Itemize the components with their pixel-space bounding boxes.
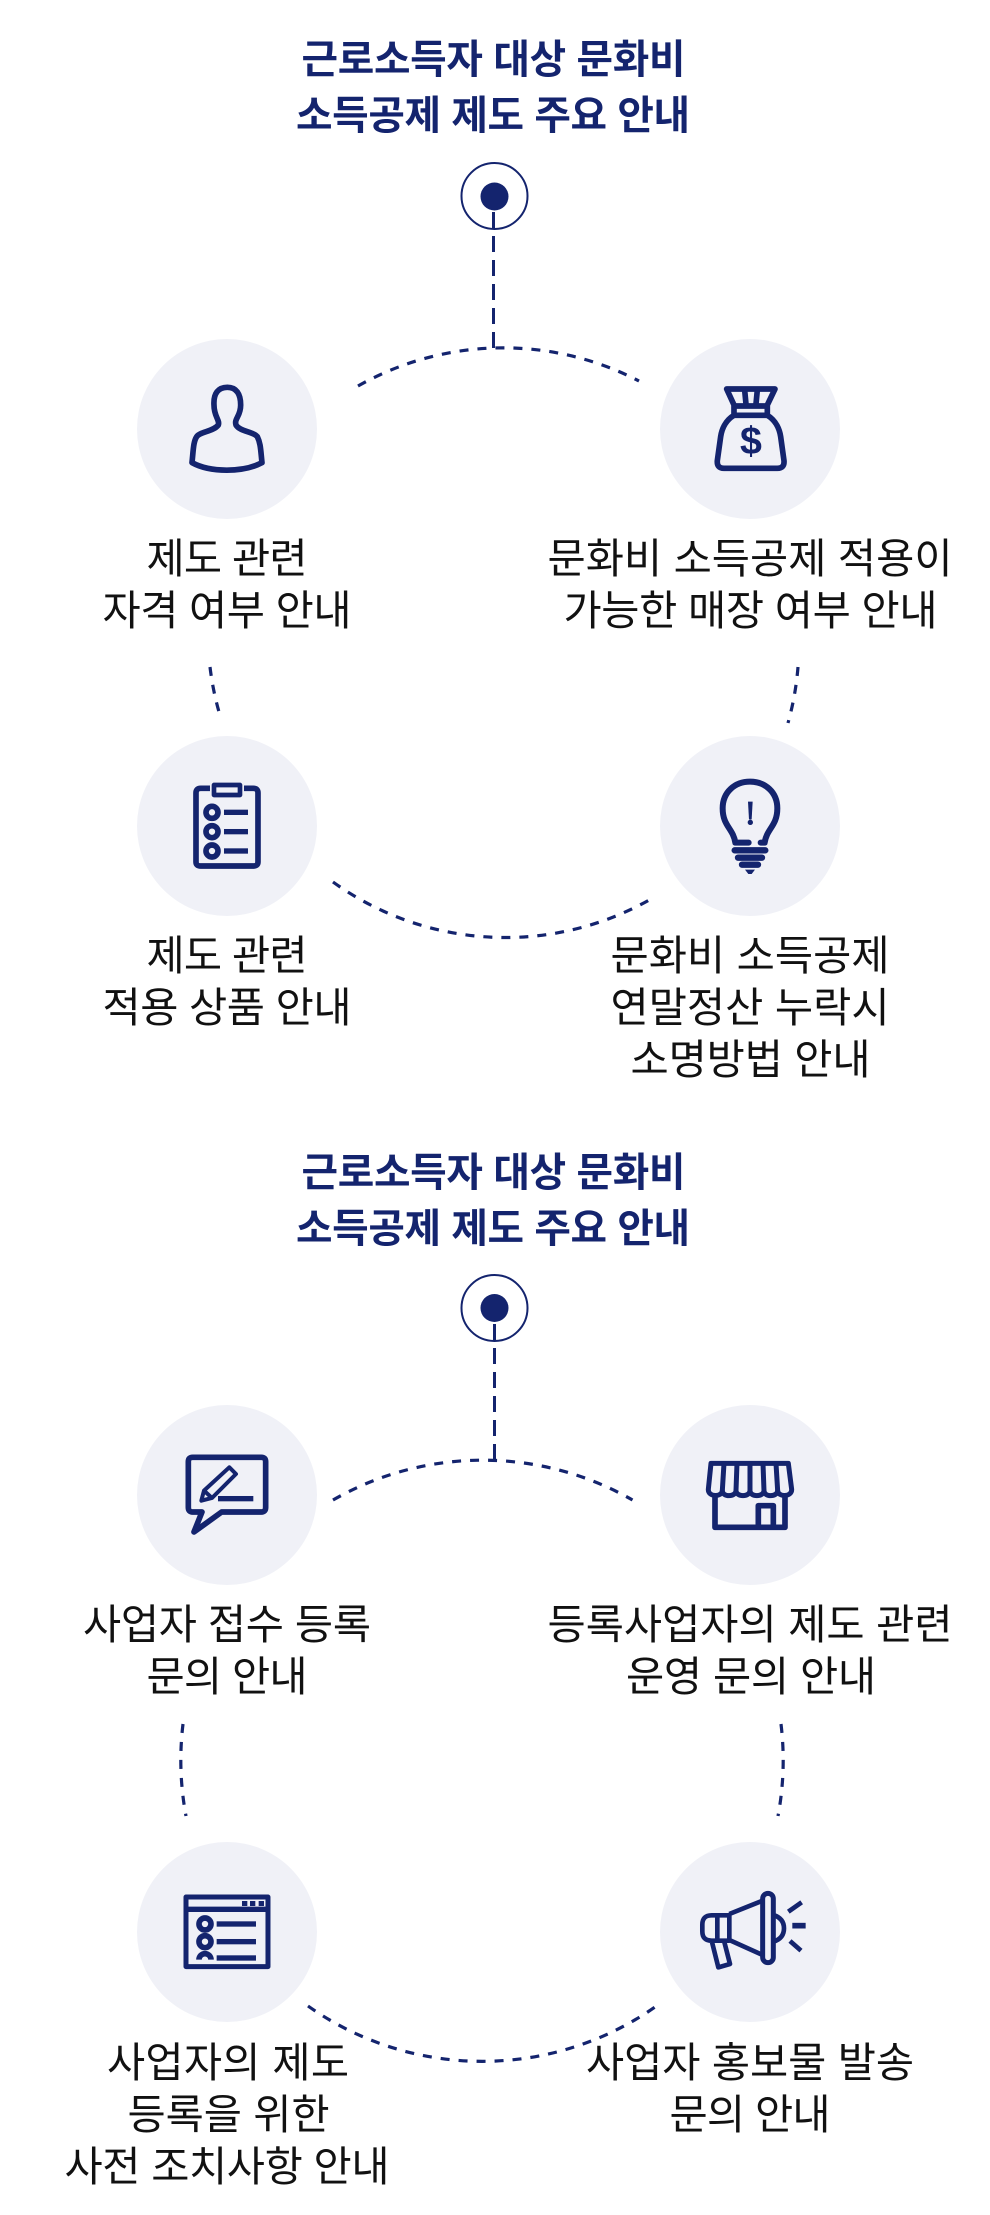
icon: megaphone (702, 1893, 806, 1967)
title: section 2 (296, 1151, 690, 1251)
label: operations: 등록사업자의 제도 관련 (548, 1601, 952, 1648)
title: section 1: 소득공제 제도 주요 안내 (296, 94, 690, 138)
label: preparation: 사전 조치사항 안내 (64, 2143, 390, 2190)
dashed arc: left, section 1 (210, 667, 219, 712)
label: omission appeal: 연말정산 누락시 (610, 984, 890, 1031)
panel: section 2 (64, 1151, 952, 2190)
label: omission appeal: 문화비 소득공제 (610, 932, 890, 979)
title: section 1: 근로소득자 대상 문화비 (302, 38, 686, 82)
dashed arc: top, section 1 (358, 348, 639, 386)
icon: browser window list (186, 1897, 268, 1967)
label: applicable goods: 적용 상품 안내 (102, 984, 352, 1031)
dashed arc: bottom, section 1 (333, 882, 651, 938)
label: eligible stores: 문화비 소득공제 적용이 (548, 535, 952, 582)
item: preparation (64, 1842, 390, 2190)
icon: money bag: $ (740, 419, 762, 463)
icon: person (192, 387, 262, 470)
item: applicable goods (102, 736, 352, 1031)
label: omission appeal: 소명방법 안내 (630, 1036, 870, 1083)
item: promotion (586, 1842, 914, 2138)
label: eligibility: 자격 여부 안내 (102, 587, 352, 634)
label: registration: 사업자 접수 등록 (83, 1601, 371, 1648)
item: omission appeal (610, 736, 890, 1083)
item: registration (83, 1405, 371, 1700)
start marker: section 2 (462, 1275, 528, 1341)
icon: storefront (708, 1463, 792, 1527)
label: omission appeal (610, 932, 890, 1083)
connector line: section 2 (493, 1324, 496, 1460)
title: section 2: 근로소득자 대상 문화비 (302, 1151, 686, 1195)
item: operations (548, 1405, 952, 1700)
panel: section 1 (102, 38, 952, 1083)
label: applicable goods (102, 932, 352, 1031)
label: eligibility (102, 535, 352, 634)
label: operations (548, 1601, 952, 1700)
dashed arc: right, section 1 (788, 667, 798, 723)
label: preparation: 등록을 위한 (128, 2091, 330, 2138)
item: eligibility (102, 339, 352, 634)
dashed arc: left, section 2 (181, 1724, 186, 1816)
connector line: section 1 (492, 212, 495, 348)
dashed arc: right, section 2 (778, 1724, 783, 1816)
dashed arc: bottom, section 2 (308, 2006, 656, 2061)
title: section 2: 소득공제 제도 주요 안내 (296, 1207, 690, 1251)
icon: light bulb (723, 782, 777, 874)
label: applicable goods: 제도 관련 (146, 932, 308, 979)
dashed arc: top, section 2 (333, 1460, 632, 1500)
start marker: section 1 (462, 163, 528, 229)
icon: speech bubble with pencil (188, 1457, 266, 1532)
label: eligible stores (548, 535, 952, 634)
label: promotion (586, 2039, 914, 2138)
title: section 1 (296, 38, 690, 138)
label: registration: 문의 안내 (146, 1653, 308, 1700)
label: operations: 운영 문의 안내 (626, 1653, 876, 1700)
label: preparation (64, 2039, 390, 2190)
icon: clipboard (196, 785, 258, 866)
label: promotion: 문의 안내 (670, 2091, 830, 2138)
label: promotion: 사업자 홍보물 발송 (586, 2039, 914, 2086)
item: eligible stores (548, 339, 952, 634)
label: eligibility: 제도 관련 (146, 535, 308, 582)
label: eligible stores: 가능한 매장 여부 안내 (564, 587, 938, 634)
label: preparation: 사업자의 제도 (107, 2039, 349, 2086)
label: registration (83, 1601, 371, 1700)
icon: money bag (717, 389, 784, 468)
